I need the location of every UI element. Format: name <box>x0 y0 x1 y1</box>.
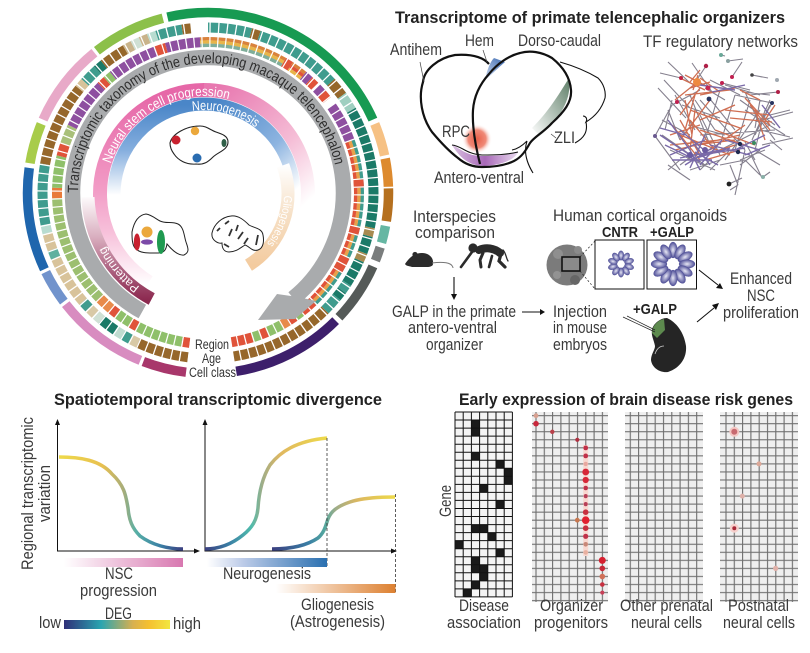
other prenatal label <box>620 597 713 632</box>
disease association label <box>447 597 521 632</box>
network graph <box>655 55 793 195</box>
organizer labels: Antero-ventral <box>434 169 524 187</box>
panel: human cortical organoids <box>546 207 799 372</box>
postnatal label: Postnatal <box>728 597 789 615</box>
organizer progenitors label: progenitors <box>534 614 608 632</box>
antero-ventral region <box>452 145 518 166</box>
other prenatal label: neural cells <box>631 614 702 632</box>
DEG legend: low <box>39 614 61 632</box>
DEG legend: DEG <box>105 605 132 623</box>
heading: TF regulatory networks: TF regulatory networks <box>643 33 798 51</box>
axes <box>55 419 200 554</box>
enhanced NSC proliferation text: Enhanced <box>730 270 792 288</box>
patterning arc label: Patterning <box>100 246 139 293</box>
icon: monkey <box>461 243 508 267</box>
neural stem cell progression band <box>100 90 308 282</box>
interspecies heading <box>413 208 496 242</box>
heading: spatiotemporal transcriptomic divergence: Spatiotemporal transcriptomic divergence <box>54 391 382 409</box>
GALP organizer text: organizer <box>426 336 483 354</box>
interspecies heading: comparison <box>415 224 495 242</box>
arrow: to injection <box>522 309 545 315</box>
taxonomy arc label: Transcriptomic taxonomy of the developing macaque telencephalon <box>68 52 342 192</box>
panel: disease risk gene matrices <box>437 412 798 632</box>
hem region <box>485 58 505 80</box>
neurogenesis band <box>114 104 294 202</box>
divergence curve <box>59 457 183 549</box>
panel: TF regulatory networks <box>643 33 798 195</box>
organizer labels <box>390 32 601 187</box>
GALP organizer text <box>392 303 516 354</box>
control organoid box: CNTR <box>602 224 638 241</box>
panel: telencephalic organizers brain <box>390 32 605 187</box>
disease association label: association <box>447 614 521 632</box>
control organoid box <box>595 224 644 289</box>
RPC region <box>462 124 492 154</box>
injection text: in mouse <box>553 319 607 337</box>
neurogenesis arc label: Neurogenesis <box>192 100 259 127</box>
other prenatal neural cells matrix <box>625 412 703 602</box>
tile separators <box>50 34 366 352</box>
expression dots <box>533 413 606 595</box>
gliogenesis gradient bar <box>276 584 396 593</box>
ring labels: Region <box>195 337 229 352</box>
enhanced NSC proliferation text <box>723 270 799 322</box>
network nodes <box>653 53 780 186</box>
enhanced NSC proliferation text: NSC <box>747 287 775 305</box>
gliogenesis arc label: Gliogenesis <box>268 196 292 246</box>
ring labels: Cell class <box>189 365 236 380</box>
DEG legend: high <box>173 615 201 633</box>
interspecies heading: Interspecies <box>413 208 496 226</box>
+GALP injection label: +GALP <box>633 301 677 318</box>
organizer progenitors label <box>534 597 608 632</box>
neurogenesis label: Neurogenesis <box>223 565 311 583</box>
gray taxonomy arrow <box>72 58 344 328</box>
ring labels <box>189 337 236 380</box>
arrow: organoid to proliferation <box>699 270 723 289</box>
icon: brain with progenitor sites <box>170 126 228 164</box>
postnatal label <box>723 597 795 632</box>
organizer labels: Hem <box>465 32 494 50</box>
injection text <box>553 303 607 354</box>
gliogenesis label: Gliogenesis <box>301 596 374 614</box>
other prenatal label: Other prenatal <box>620 597 713 615</box>
heading: transcriptome of primate telencephalic organizers: Transcriptome of primate telencephalic organizers <box>395 9 785 27</box>
dashed guides <box>327 438 396 592</box>
icon: mouse <box>405 252 453 268</box>
NSC gradient bar <box>64 558 183 567</box>
arrow: down to GALP <box>451 277 457 300</box>
icon: large rosette <box>651 242 695 286</box>
organizer progenitors label: Organizer <box>540 597 603 615</box>
age tile ring <box>42 28 374 358</box>
panel: interspecies comparison <box>392 208 607 354</box>
GALP organoid box: +GALP <box>650 224 694 241</box>
icon: mouse embryo injection <box>623 316 686 372</box>
axes <box>202 419 397 554</box>
brain outline <box>420 50 605 173</box>
disease association label: Disease <box>459 597 509 615</box>
organizer labels: RPC <box>442 123 470 141</box>
postnatal dots <box>729 427 778 571</box>
organizer labels: Dorso-caudal <box>518 32 601 50</box>
enhanced NSC proliferation text: proliferation <box>723 304 799 322</box>
panel: circular transcriptomic taxonomy <box>22 8 394 380</box>
DEG legend <box>39 605 201 633</box>
GALP organoid box <box>647 224 696 289</box>
icon: brain with glial marks <box>212 216 263 252</box>
disease association matrix <box>455 412 512 597</box>
neurogenesis curve <box>205 438 327 549</box>
gliogenesis band <box>248 165 288 265</box>
gliogenesis curve <box>272 497 395 549</box>
y-axis label: Regional transcriptomic <box>19 417 37 570</box>
panel: neurogenesis and gliogenesis chart <box>202 419 397 631</box>
gene axis label: Gene <box>437 485 455 517</box>
icon: small rosette <box>607 251 635 277</box>
patterning band <box>88 197 152 299</box>
postnatal label: neural cells <box>723 614 795 632</box>
injection text: Injection <box>553 303 607 321</box>
postnatal neural cells matrix <box>720 412 798 602</box>
organizer labels: ZLI <box>554 129 575 147</box>
injection text: embryos <box>553 336 607 354</box>
icon: organoid sphere <box>546 241 595 289</box>
NSC progression label: NSC <box>105 565 133 583</box>
GALP organizer text: antero-ventral <box>408 319 497 337</box>
region tile ring <box>54 39 362 347</box>
ring labels: Age <box>202 351 221 366</box>
heading: early expression of brain disease risk genes: Early expression of brain disease risk genes <box>459 391 793 409</box>
organizer labels: Antihem <box>390 41 442 59</box>
organizer progenitors matrix <box>532 412 608 602</box>
y-axis label: variation <box>36 465 54 522</box>
arrow: embryo to proliferation <box>697 303 719 322</box>
icon: brain with organizers <box>132 214 188 255</box>
organoids heading: Human cortical organoids <box>553 207 727 225</box>
NSC progression label: progression <box>80 582 157 600</box>
zona limitans region <box>532 78 569 136</box>
neurogenesis gradient bar <box>207 558 327 567</box>
panel: NSC progression chart <box>19 417 201 633</box>
NSC progression label <box>80 565 157 600</box>
outer cell-class arc band <box>28 12 388 374</box>
neural stem cell progression label: Neural stem cell progression <box>102 86 230 163</box>
y-axis label <box>19 417 54 570</box>
gliogenesis label <box>290 596 385 631</box>
gliogenesis label: (Astrogenesis) <box>290 613 385 631</box>
GALP organizer text: GALP in the primate <box>392 303 516 321</box>
